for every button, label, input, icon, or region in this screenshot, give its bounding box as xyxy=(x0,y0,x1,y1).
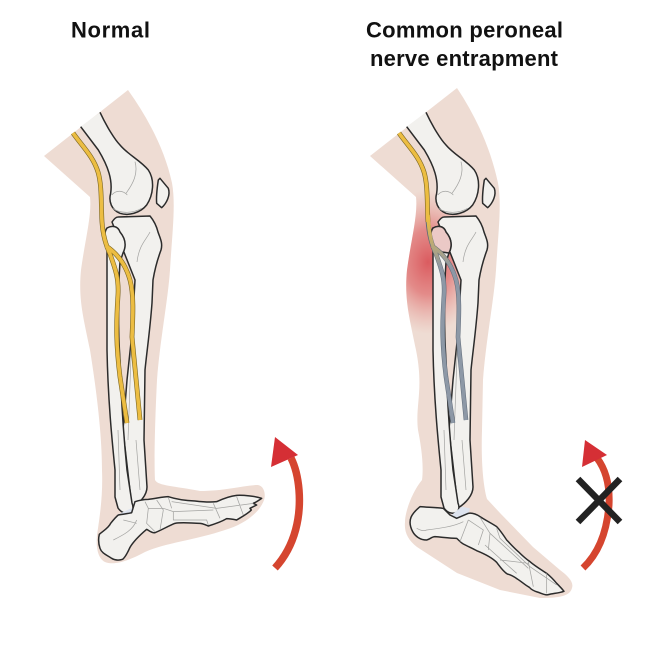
nerve xyxy=(73,133,140,423)
femur xyxy=(81,112,153,214)
foot bones xyxy=(99,495,262,560)
femur xyxy=(407,112,479,214)
title: Common peroneal nerve entrapment: Common peroneal xyxy=(366,18,563,42)
title: Common peroneal nerve entrapment xyxy=(366,18,563,71)
panel: entrapment leg xyxy=(370,88,572,598)
leg skin silhouette xyxy=(44,90,265,563)
icon: black cross xyxy=(578,479,620,522)
leg skin silhouette xyxy=(370,88,572,598)
tibia xyxy=(112,216,162,508)
nerve turning grey xyxy=(399,133,466,423)
arrow: normal foot lifts xyxy=(271,437,299,568)
patella xyxy=(156,178,169,208)
title: Common peroneal nerve entrapment: nerve entrapment xyxy=(370,46,559,71)
tibia xyxy=(438,216,488,508)
fibula xyxy=(431,226,459,513)
title: Normal: Normal xyxy=(71,18,150,42)
panel: normal leg xyxy=(44,90,265,563)
foot bones xyxy=(410,507,564,595)
arrow: foot cannot lift xyxy=(582,440,609,568)
fibula xyxy=(105,226,133,513)
red inflammation glow xyxy=(406,196,462,328)
patella xyxy=(482,178,495,208)
